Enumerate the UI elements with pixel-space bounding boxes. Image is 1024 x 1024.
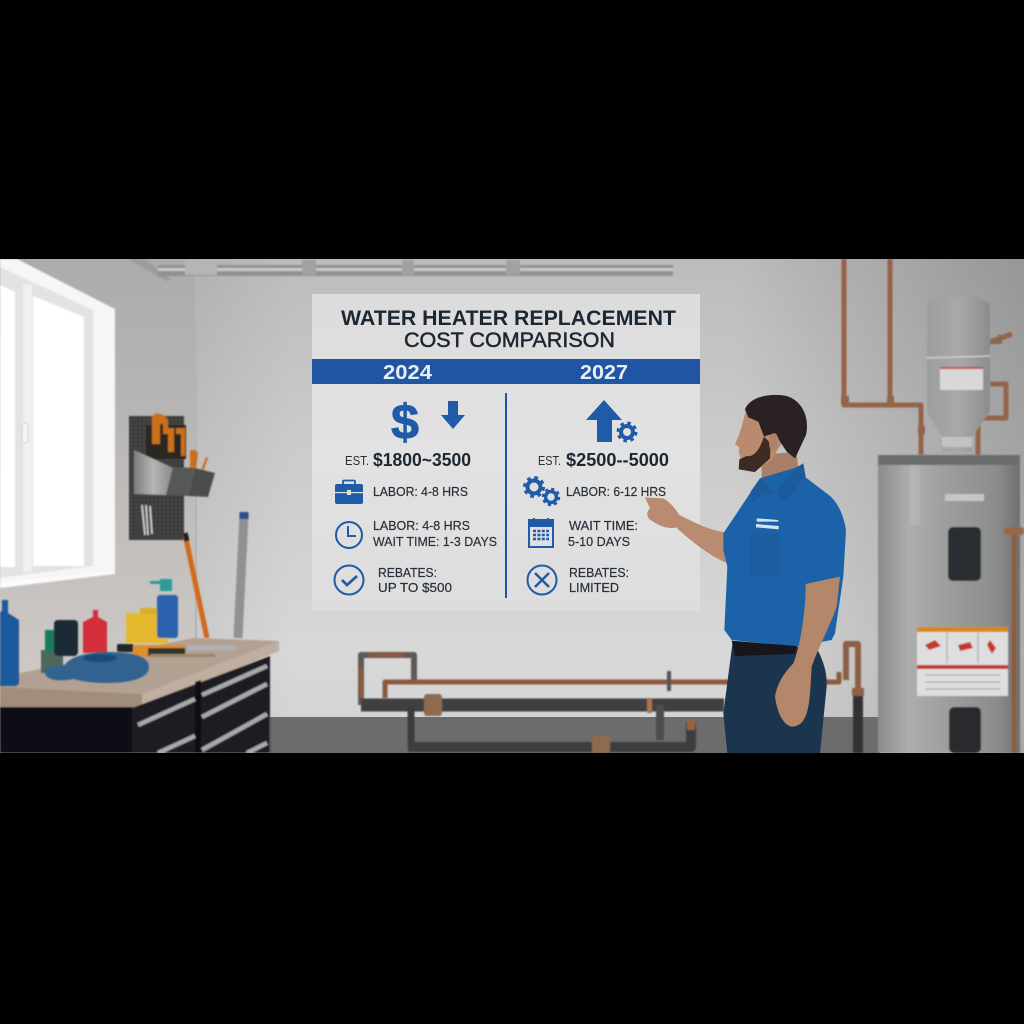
lowered arm — [775, 577, 840, 727]
2024 estimate: EST. — [345, 454, 369, 468]
trousers — [723, 642, 827, 753]
icon: clock — [336, 522, 362, 548]
face — [735, 410, 782, 472]
beard — [739, 437, 771, 472]
2024 labor text: LABOR: 4-8 HRS — [373, 484, 468, 499]
floor skirting strip — [270, 717, 880, 753]
wall pipes under panel — [361, 644, 864, 753]
blue hose coil — [45, 652, 149, 683]
2024 wait text: LABOR: 4-8 HRS — [373, 518, 470, 533]
year band — [312, 359, 700, 384]
2024 rebates text: UP TO $500 — [378, 580, 452, 595]
year band: 2024 — [383, 362, 433, 384]
copper pipes above heater — [841, 259, 1012, 455]
orange-handled broom — [185, 533, 207, 638]
icon: calendar — [529, 518, 553, 547]
pegboard with tool bin — [129, 413, 215, 540]
workbench — [0, 638, 279, 753]
title: COST COMPARISON — [404, 328, 615, 352]
shirt pocket — [750, 533, 780, 575]
garage scene backdrop — [0, 259, 1024, 753]
2027 wait text: 5-10 DAYS — [568, 534, 630, 549]
icon: briefcase — [335, 480, 363, 504]
icon: up arrow — [586, 400, 622, 442]
ear — [769, 433, 778, 451]
hair — [745, 395, 807, 458]
ceiling rail — [128, 259, 673, 281]
icon: gears — [524, 478, 559, 505]
top letterbox bar — [0, 0, 1024, 259]
2027 rebates text: LIMITED — [569, 580, 619, 595]
icon: down arrow — [441, 401, 465, 429]
neck — [762, 452, 798, 492]
shirt logo — [756, 518, 779, 529]
2027 labor text: LABOR: 6-12 HRS — [566, 484, 666, 499]
shirt — [723, 463, 846, 647]
shirt collar — [751, 463, 806, 503]
technician — [645, 395, 846, 753]
2027 estimate: EST. — [538, 454, 561, 468]
2027 estimate: $2500--5000 — [566, 450, 669, 470]
water heater — [878, 455, 1024, 753]
bottom letterbox bar — [0, 753, 1024, 1024]
grey pole — [238, 512, 244, 638]
2024 estimate: $1800~3500 — [373, 450, 471, 470]
icon: check circle — [334, 566, 364, 594]
info panel — [312, 294, 700, 611]
icon: gear — [618, 423, 636, 441]
2024 rebates text — [378, 565, 452, 595]
column divider — [505, 393, 507, 598]
pointing arm — [645, 497, 729, 564]
2027 rebates text — [569, 565, 629, 595]
2027 wait text — [568, 518, 638, 549]
year band: 2027 — [580, 362, 628, 384]
2024 wait text — [373, 518, 497, 549]
belt — [732, 641, 797, 656]
icon: x circle — [528, 566, 556, 594]
2027 rebates text: REBATES: — [569, 565, 629, 580]
icon: dollar sign: $ — [391, 396, 419, 450]
expansion tank — [926, 297, 1002, 452]
2027 wait text: WAIT TIME: — [569, 518, 638, 533]
2024 rebates text: REBATES: — [378, 565, 437, 580]
bench items: bottles, box, tools — [0, 579, 235, 686]
title: WATER HEATER REPLACEMENT — [341, 306, 676, 330]
2024 wait text: WAIT TIME: 1-3 DAYS — [373, 534, 497, 549]
window — [0, 259, 115, 588]
title — [341, 306, 676, 352]
